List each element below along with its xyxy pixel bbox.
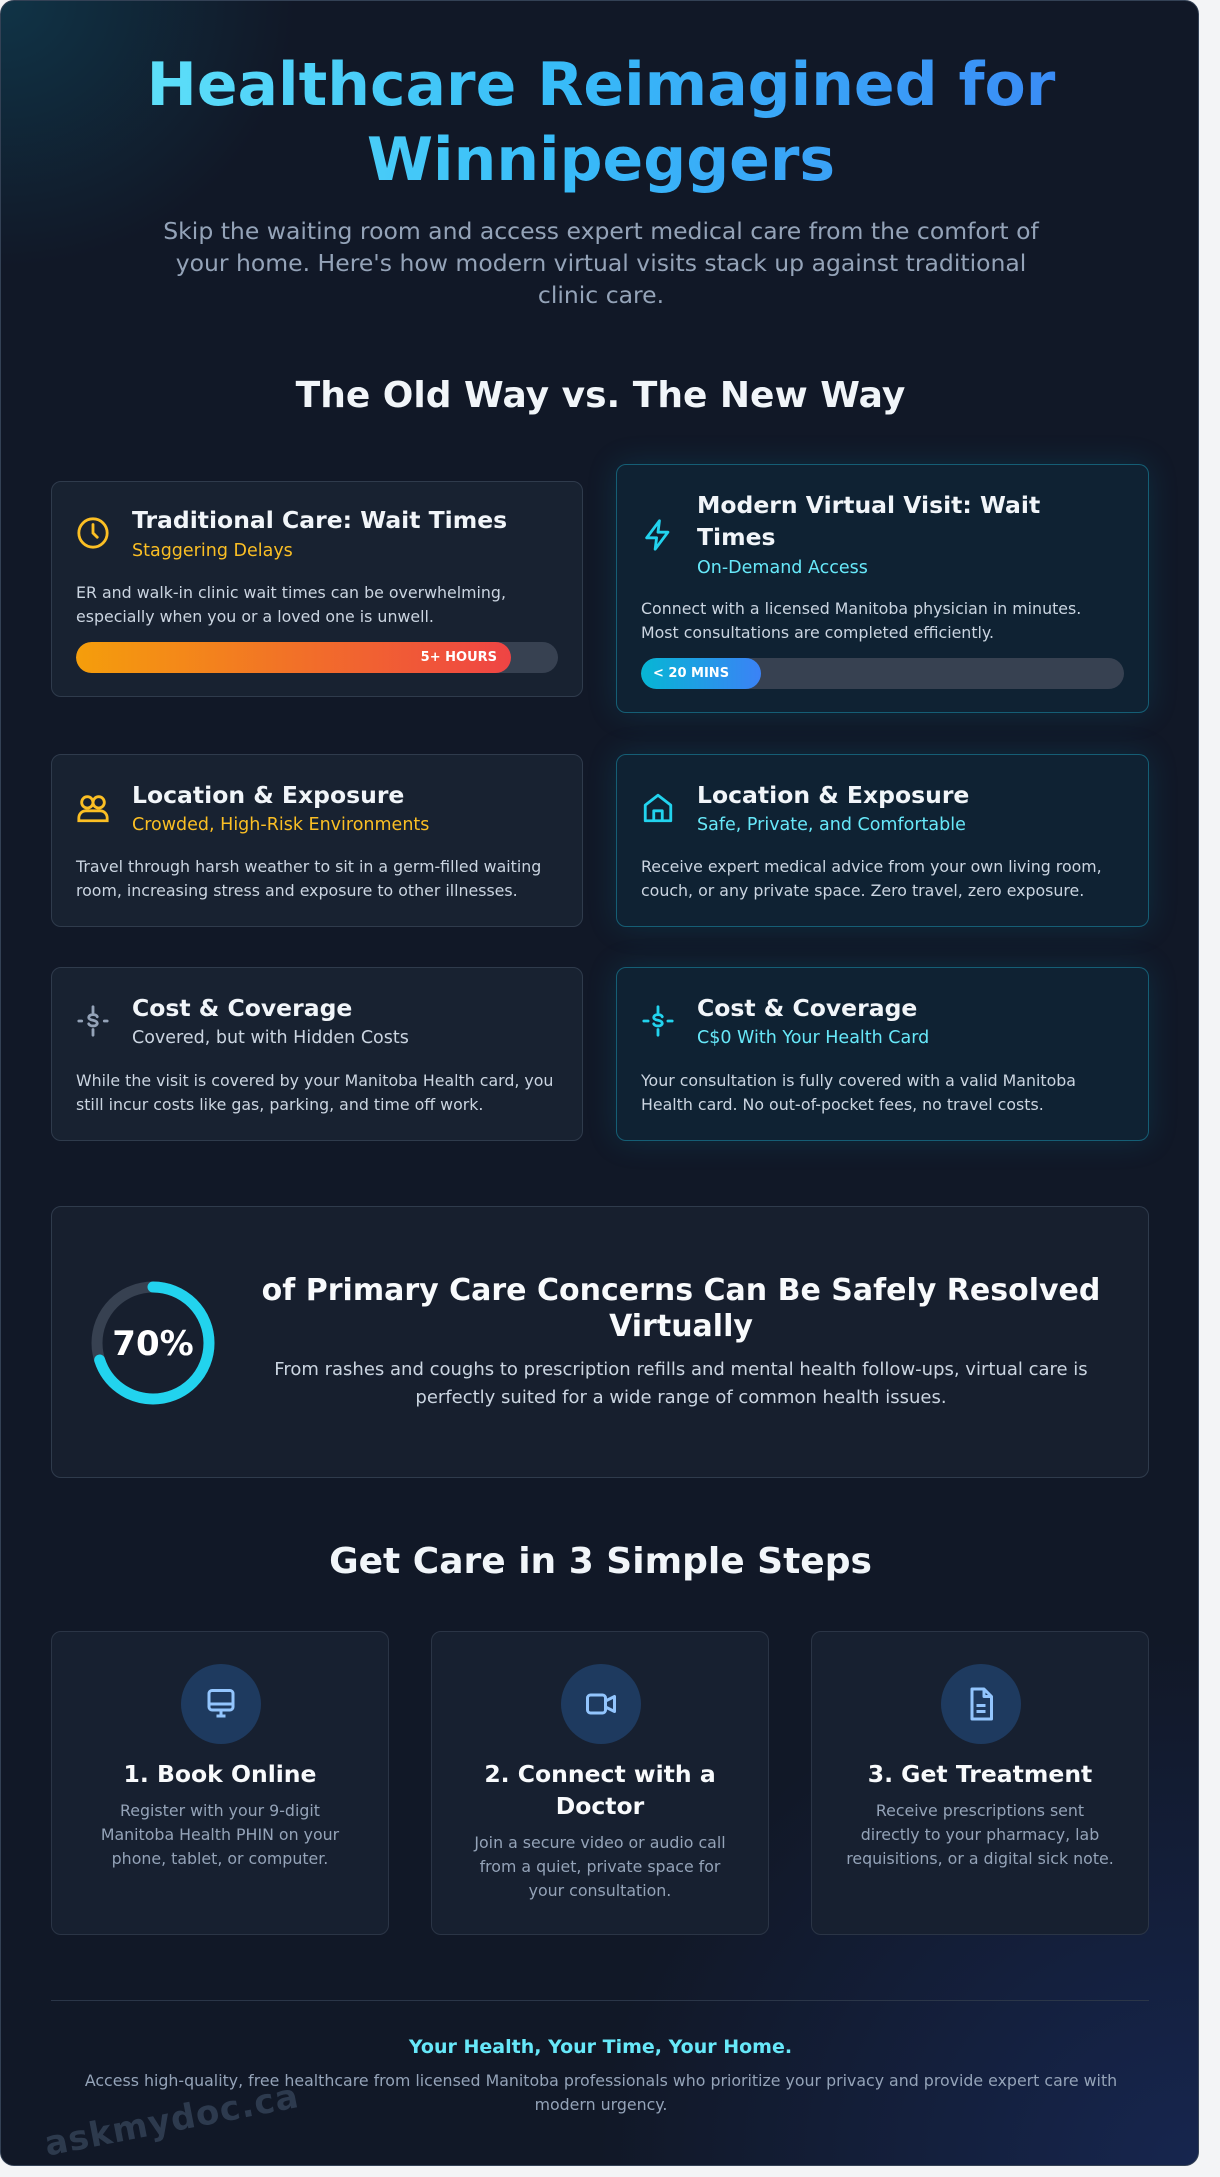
stat body: From rashes and coughs to prescription refills and mental health follow-ups, virtual care is perfectly suited for a wide range of common health issues. [274,1359,1088,1408]
title: Location & Exposure [697,781,969,809]
icon: dollar [77,1005,109,1037]
chart: ring 70%: 70% [112,1324,194,1364]
step title: 3. Get Treatment [868,1760,1092,1788]
title: Traditional Care: Wait Times [132,506,507,534]
title: Location & Exposure [132,781,404,809]
step 2 [431,1631,769,1935]
watermark: askmydoc.ca [41,2076,302,2165]
step 1 [51,1631,389,1935]
title: Cost & Coverage [697,994,917,1022]
icon: monitor [181,1664,261,1744]
bar: 5+ hours: 5+ HOURS [421,650,497,665]
icon: home [644,794,672,822]
footer tagline: Your Health, Your Time, Your Home. [409,2036,792,2058]
icon: clock [77,517,109,549]
bar: under 20 mins: < 20 MINS [653,666,729,681]
body: While the visit is covered by your Manitoba Health card, you still incur costs like gas, parking, and time off work. [76,1071,553,1114]
step body: Join a secure video or audio call from a quiet, private space for your consultation. [474,1833,726,1900]
heading: steps: Get Care in 3 Simple Steps [329,1541,872,1582]
panel: virtual location [616,754,1149,927]
panel: traditional cost [51,967,583,1141]
subtitle: clinic care. [538,281,664,309]
icon: document [941,1664,1021,1744]
step 3 [811,1631,1149,1935]
footer text: Access high-quality, free healthcare from licensed Manitoba professionals who prioritize your privacy and provide expert care with modern urgency. [85,2071,1117,2114]
icon: users [77,795,109,822]
panel: traditional wait times [51,481,583,697]
icon: video [561,1664,641,1744]
panel: 70% stat [51,1206,1149,1478]
subtitle: Crowded, High-Risk Environments [132,815,429,835]
step body: Register with your 9-digit Manitoba Health PHIN on your phone, tablet, or computer. [101,1801,339,1868]
subtitle: Safe, Private, and Comfortable [697,815,966,835]
body: Travel through harsh weather to sit in a germ-filled waiting room, increasing stress and exposure to other illnesses. [76,857,541,900]
step title: 2. Connect with a Doctor [484,1760,716,1820]
stat heading: of Primary Care Concerns Can Be Safely Resolved Virtually [262,1273,1100,1344]
chart: ring 70% [92,1282,214,1404]
bar: under 20 mins [641,658,1124,689]
subtitle: Skip the waiting room and access expert medical care from the comfort of [163,217,1039,245]
step body: directly to your pharmacy, lab [861,1825,1099,1844]
step body: Receive prescriptions sent [876,1801,1084,1820]
subtitle: Staggering Delays [132,541,293,561]
body: Connect with a licensed Manitoba physician in minutes. Most consultations are completed efficiently. [641,599,1081,642]
subtitle: C$0 With Your Health Card [697,1028,929,1048]
panel: virtual wait times [616,464,1149,713]
icon: lightning [645,519,670,551]
subtitle [163,217,1040,309]
panel: virtual cost [616,967,1149,1141]
subtitle: your home. Here's how modern virtual visits stack up against traditional [176,249,1026,277]
step body [846,1801,1114,1868]
subtitle: Covered, but with Hidden Costs [132,1028,409,1048]
step title: 1. Book Online [124,1760,316,1788]
body: Receive expert medical advice from your own living room, couch, or any private space. Zero travel, zero exposure. [641,857,1102,900]
icon: dollar [642,1005,674,1037]
title: Healthcare Reimagined for Winnipeggers [147,50,1055,195]
body: ER and walk-in clinic wait times can be overwhelming, especially when you or a loved one is unwell. [76,583,506,626]
step body: requisitions, or a digital sick note. [846,1849,1114,1868]
panel: traditional location [51,754,583,927]
title: Modern Virtual Visit: Wait Times [697,491,1040,551]
bar: 5+ hours [76,642,558,673]
body: Your consultation is fully covered with a valid Manitoba Health card. No out-of-pocket fees, no travel costs. [641,1071,1076,1114]
subtitle: On-Demand Access [697,558,868,578]
title: Cost & Coverage [132,994,352,1022]
heading: old vs new: The Old Way vs. The New Way [296,375,905,416]
